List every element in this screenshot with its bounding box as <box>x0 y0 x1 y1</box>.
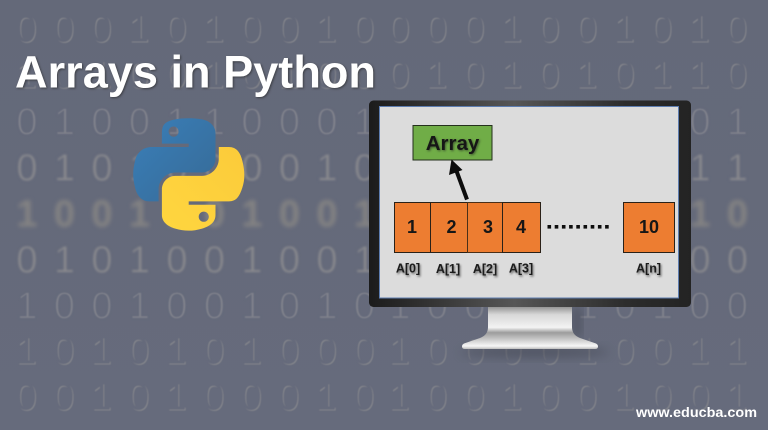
binary digit pattern: 01010010010101001000 <box>16 240 748 282</box>
index labels: A[n] <box>636 262 661 276</box>
cell 10: 10 <box>639 217 659 237</box>
array box: Array <box>426 132 480 155</box>
cell 10 <box>624 202 674 252</box>
monitor <box>369 100 691 357</box>
monitor screen <box>380 106 678 298</box>
binary digit pattern: 00101000101001001001 <box>16 378 748 420</box>
cell 4 <box>502 202 540 252</box>
binary digit pattern: 10010010101001010100 <box>16 286 748 328</box>
cell 4: 4 <box>516 217 526 237</box>
binary digit pattern: 10011010011001010010 <box>16 194 748 236</box>
index labels: A[0] <box>396 262 420 276</box>
binary digit pattern: 10100101000101010110 <box>16 56 748 98</box>
website url: www.educba.com <box>635 405 757 420</box>
cell 2: 2 <box>446 217 457 237</box>
cell 3: 3 <box>483 217 493 237</box>
monitor stand <box>461 306 609 357</box>
cell 1 <box>394 202 430 252</box>
binary digit pattern: 01001100010101100101 <box>16 102 748 144</box>
cell 3 <box>468 202 502 252</box>
monitor bezel <box>369 100 691 307</box>
index labels: A[2] <box>473 262 497 276</box>
index labels <box>396 262 661 276</box>
arrow <box>449 160 467 200</box>
index labels: A[3] <box>509 262 533 276</box>
cell 1: 1 <box>407 217 417 237</box>
binary digit pattern: 10101010001000010011 <box>16 332 748 374</box>
array box <box>413 126 492 160</box>
title: Arrays in Python <box>15 46 376 98</box>
icon: python logo <box>133 118 244 231</box>
index labels: A[1] <box>436 262 460 276</box>
ellipsis dots <box>548 225 609 229</box>
array cells <box>394 202 674 252</box>
cell 2 <box>430 202 468 252</box>
binary digit pattern: 00010100100001001010 <box>16 10 748 52</box>
binary digit pattern: 01010000100010010111 <box>16 148 748 190</box>
